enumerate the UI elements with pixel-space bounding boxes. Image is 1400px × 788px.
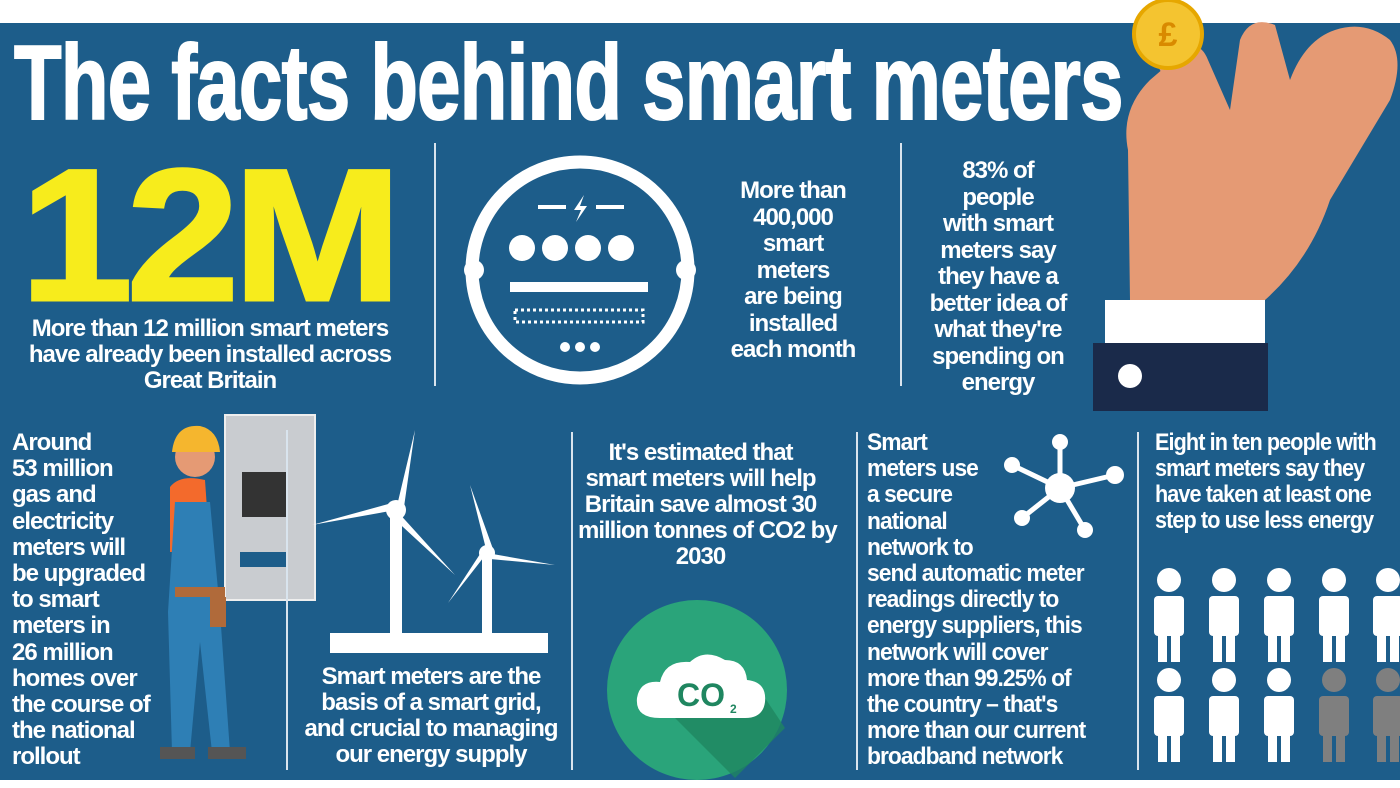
- text: 83%: they have a: [938, 263, 1058, 290]
- text: CO2 savings: 2030: [676, 543, 725, 570]
- text: smart grid: Smart meters are the: [322, 663, 540, 690]
- text: smart grid: basis of a smart grid,: [321, 689, 541, 716]
- text: 53 million meters: meters in: [12, 612, 110, 639]
- text: secure network: broadband network: [867, 743, 1062, 770]
- text: secure network: Smart: [867, 429, 927, 456]
- icon: CO2 cloud: CO: [677, 677, 725, 713]
- text: 53 million meters: Around: [12, 429, 91, 456]
- text: smart grid: [304, 663, 558, 768]
- text: CO2 savings: [578, 439, 838, 570]
- text: 53 million meters: electricity: [12, 508, 113, 535]
- text: smart grid: our energy supply: [335, 741, 527, 768]
- text: secure network: more than 99.25% of: [867, 665, 1071, 692]
- text: 83%: what they're: [934, 316, 1062, 343]
- pictogram: 8 of 10 people: [1154, 568, 1400, 762]
- text: 53 million meters: the national: [12, 717, 135, 744]
- icon: network: [1004, 434, 1124, 538]
- text: 400,000 per month: are being: [744, 283, 842, 310]
- icon: smart meter: [464, 156, 696, 384]
- illustration: hand with coin: [1093, 0, 1398, 411]
- text: secure network: a secure: [867, 481, 952, 508]
- text: secure network: energy suppliers, this: [867, 612, 1082, 639]
- text: 400,000 per month: [731, 177, 855, 363]
- illustration: wind turbines: [313, 430, 554, 653]
- text: CO2 savings: Britain save almost 30: [585, 491, 816, 518]
- text: CO2 savings: million tonnes of CO2 by: [578, 517, 837, 544]
- text: 400,000 per month: installed: [749, 310, 837, 336]
- text: 53 million meters: meters will: [12, 534, 125, 561]
- icon: CO2 cloud: 2: [730, 702, 737, 716]
- text: smart grid: and crucial to managing: [304, 715, 558, 742]
- text: 53 million meters: rollout: [12, 743, 80, 770]
- text: 83%: energy: [962, 369, 1034, 396]
- text: 53 million meters: homes over: [12, 665, 137, 692]
- text: CO2 savings: smart meters will help: [585, 465, 816, 492]
- text: secure network: network will cover: [867, 639, 1048, 666]
- text: secure network: meters use: [867, 455, 978, 482]
- text: 400,000 per month: smart: [763, 230, 823, 257]
- text: 12 million installed: have already been installed across: [29, 341, 391, 368]
- title: The facts behind smart meters: [14, 24, 1123, 142]
- text: 83%: better idea of: [930, 290, 1066, 316]
- text: secure network: national: [867, 508, 947, 535]
- text: secure network: [867, 429, 1086, 770]
- text: eight in ten: smart meters say they: [1155, 455, 1364, 482]
- text: eight in ten: step to use less energy: [1155, 507, 1373, 534]
- text: 53 million meters: [12, 429, 151, 770]
- text: secure network: network to: [867, 534, 973, 561]
- text: 53 million meters: the course of: [12, 691, 150, 718]
- text: 400,000 per month: More than: [740, 177, 846, 204]
- text: 83%: meters say: [940, 236, 1056, 264]
- stat: 12M: 12M: [20, 130, 396, 340]
- text: 53 million meters: 26 million: [12, 639, 113, 666]
- text: 12 million installed: [29, 315, 392, 394]
- text: eight in ten: [1155, 429, 1376, 534]
- text: 400,000 per month: meters: [757, 256, 829, 284]
- illustration: worker at panel: [160, 414, 316, 759]
- text: eight in ten: have taken at least one: [1155, 481, 1371, 508]
- text: 12 million installed: Great Britain: [144, 367, 276, 394]
- text: 53 million meters: be upgraded: [12, 560, 145, 587]
- text: eight in ten: Eight in ten people with: [1155, 429, 1376, 456]
- text: 53 million meters: 53 million: [12, 455, 113, 482]
- text: secure network: more than our current: [867, 717, 1085, 744]
- text: 53 million meters: to smart: [12, 586, 99, 613]
- icon: CO2 cloud: [607, 600, 787, 780]
- illustration: hand with coin: £: [1159, 16, 1178, 54]
- text: 400,000 per month: 400,000: [753, 204, 833, 230]
- text: 83%: 83% of: [962, 157, 1034, 184]
- text: 400,000 per month: each month: [731, 336, 855, 363]
- text: 12 million installed: More than 12 million smart meters: [32, 315, 388, 342]
- text: 83%: people: [962, 184, 1034, 210]
- text: 83%: spending on: [932, 342, 1064, 370]
- text: secure network: send automatic meter: [867, 560, 1084, 587]
- text: secure network: readings directly to: [867, 586, 1058, 613]
- text: secure network: the country – that's: [867, 691, 1057, 718]
- text: CO2 savings: It's estimated that: [608, 439, 793, 466]
- text: 83%: with smart: [943, 210, 1053, 237]
- text: 83%: [930, 157, 1068, 396]
- text: 53 million meters: gas and: [12, 481, 96, 508]
